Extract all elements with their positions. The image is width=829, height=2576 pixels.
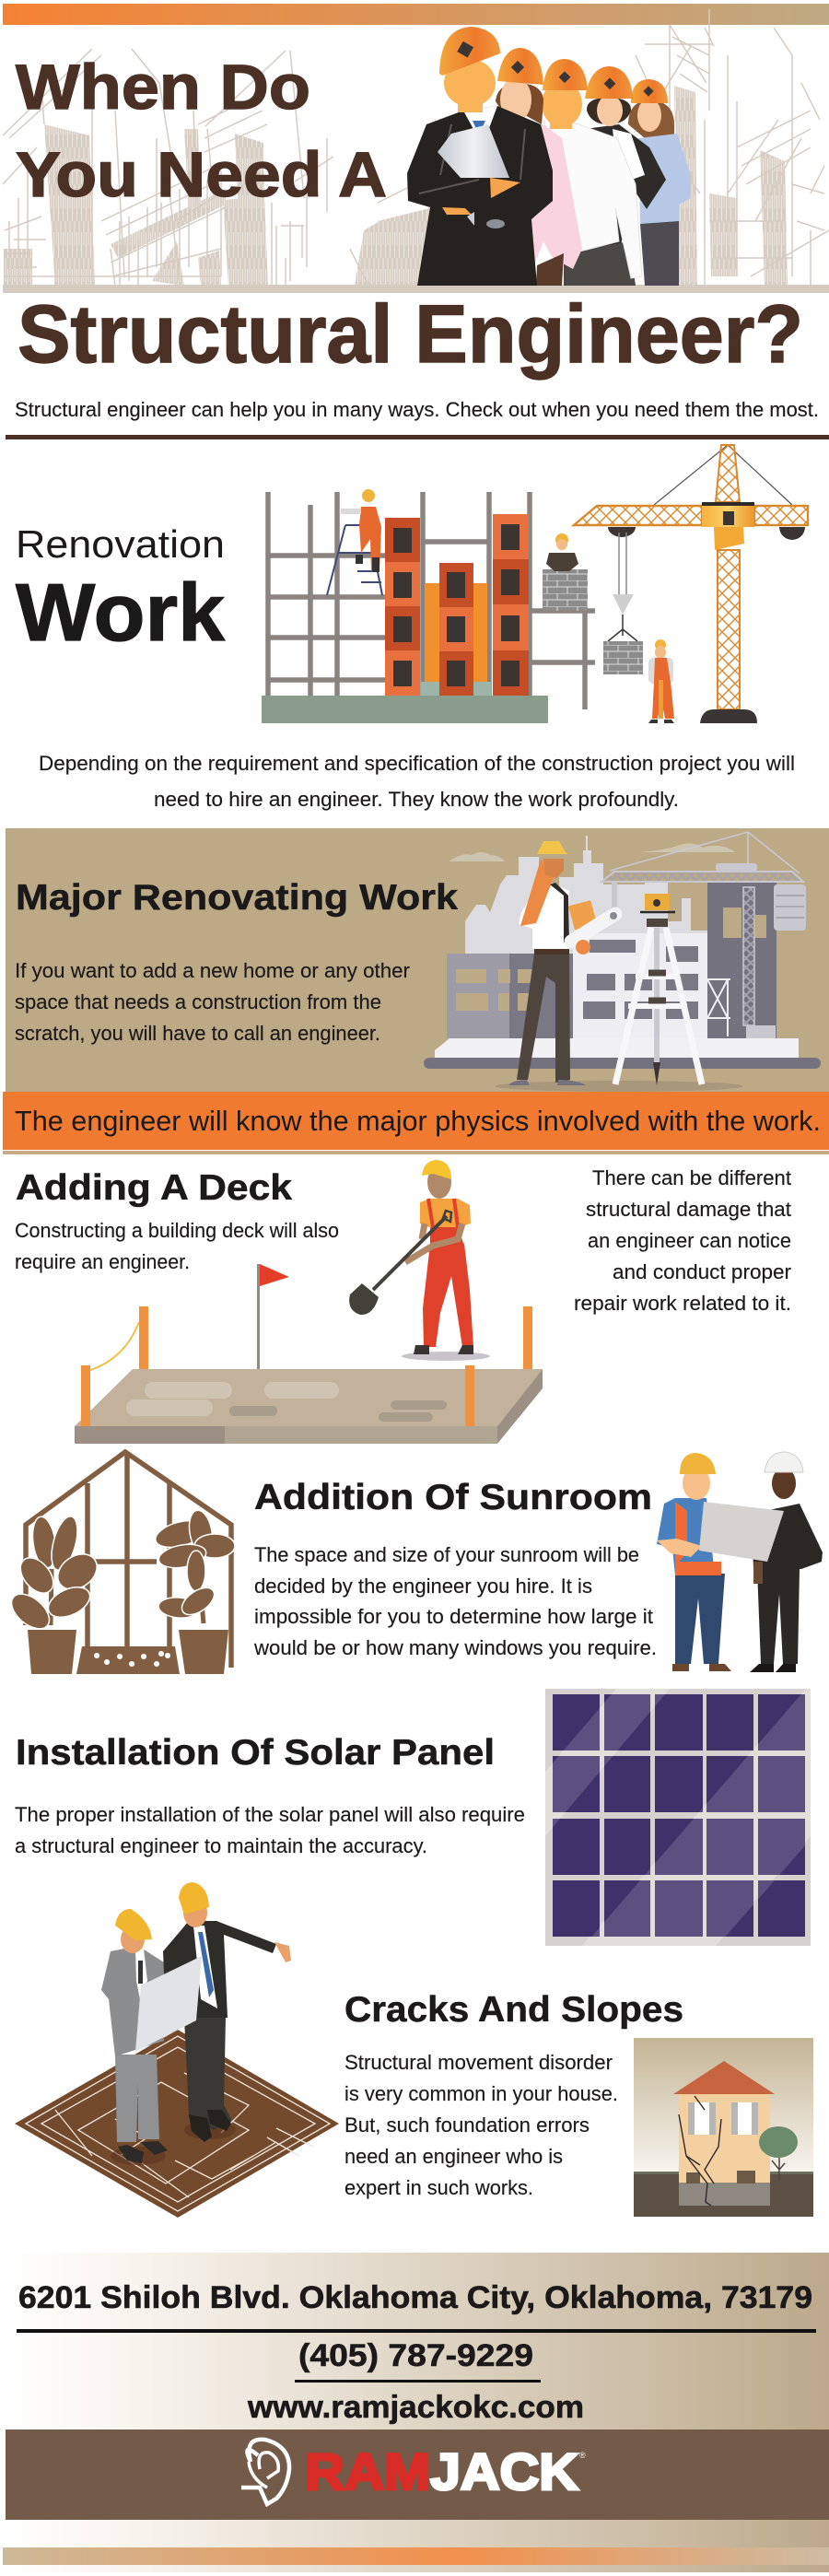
section: addition of sunroom: [6, 1452, 823, 1674]
header rule: [6, 435, 829, 439]
illustration: engineers on floor plan: [15, 1882, 339, 2218]
address: 6201 Shiloh Blvd. Oklahoma City, Oklahoma, 73179: [18, 2280, 812, 2315]
section: installation of solar panel: [15, 1689, 813, 1948]
heading major renovating: Major Renovating Work: [16, 878, 458, 918]
cracks paragraph: is very common in your house.: [344, 2082, 618, 2105]
sketch city background: [3, 9, 829, 293]
engineer in dark suit: [163, 1882, 291, 2142]
worker with shovel: [349, 1160, 490, 1361]
icon: ram head: [241, 2440, 289, 2504]
sunroom paragraph: The space and size of your sunroom will be: [254, 1543, 639, 1566]
engineer three: [542, 59, 642, 286]
engineer five: [628, 79, 691, 286]
solar paragraph: a structural engineer to maintain the accuracy.: [15, 1834, 427, 1857]
cracks paragraph: need an engineer who is: [344, 2145, 563, 2168]
phone: (405) 787-9229: [298, 2338, 533, 2373]
heading sunroom: Addition Of Sunroom: [254, 1478, 652, 1517]
website: www.ramjackokc.com: [247, 2390, 584, 2425]
major renovating paragraph: scratch, you will have to call an engineer.: [15, 1022, 380, 1045]
bottom gradient bar: [3, 2547, 829, 2565]
sunroom paragraph: would be or how many windows you require.: [253, 1636, 657, 1659]
heading adding a deck: Adding A Deck: [16, 1168, 292, 1208]
cracks paragraph: expert in such works.: [344, 2176, 533, 2199]
brand band: [6, 2430, 829, 2520]
illustration: tower crane: [574, 445, 808, 723]
major renovating paragraph: If you want to add a new home or any other: [15, 959, 410, 982]
major renovating paragraph: space that needs a construction from the: [15, 990, 381, 1013]
illustration: city construction site: [424, 832, 821, 1092]
renovation paragraph: [39, 752, 795, 811]
heading line 2: You Need A: [16, 139, 387, 210]
logo wordmark: RAM: [305, 2442, 430, 2500]
cracks paragraph: But, such foundation errors: [344, 2113, 590, 2137]
illustration: cracked house: [634, 2038, 813, 2217]
surveyor with phone and plans: [508, 841, 617, 1085]
engineer one with rolled plans: [407, 27, 553, 286]
worker with jackhammer: [648, 639, 674, 723]
heading solar panel: Installation Of Solar Panel: [16, 1733, 495, 1773]
engineer two: [496, 48, 582, 286]
worker laying bricks: [546, 533, 578, 571]
solar paragraph: The proper installation of the solar panel will also require: [15, 1803, 525, 1826]
panel: major renovating work: [6, 828, 829, 1092]
footer contact panel: [0, 2253, 829, 2572]
surveying tripod: [615, 894, 702, 1085]
deck paragraph left: [15, 1219, 339, 1273]
engineer in grey suit: [101, 1909, 168, 2163]
illustration: building under construction: [262, 489, 674, 723]
section: renovation work: [16, 445, 808, 723]
illustration: deck platform: [75, 1264, 543, 1444]
orange callout band: [3, 1092, 829, 1154]
solar paragraph: [15, 1803, 525, 1857]
header panel: [3, 9, 829, 439]
heading cracks: Cracks And Slopes: [344, 1990, 683, 2030]
deck paragraph right: repair work related to it.: [574, 1292, 791, 1315]
logo wordmark: ®: [579, 2451, 586, 2460]
engineer four: [585, 66, 666, 276]
sunroom paragraph: impossible for you to determine how large it: [254, 1605, 653, 1628]
intro sentence: Structural engineer can help you in many ways. Check out when you need them the most.: [15, 398, 819, 421]
section: cracks and slopes: [15, 1882, 813, 2218]
deck paragraph left: require an engineer.: [15, 1250, 190, 1273]
logo wordmark: [305, 2442, 586, 2500]
deck paragraph right: [574, 1166, 791, 1315]
logo wordmark: JACK: [430, 2442, 578, 2500]
blueprint sheet: [135, 1956, 202, 2052]
orange callout band: The engineer will know the major physics involved with the work.: [15, 1105, 821, 1137]
illustration: two engineers with plan: [657, 1452, 823, 1672]
renovation paragraph: Depending on the requirement and specification of the construction project you will: [39, 752, 795, 775]
floor plan: [15, 2030, 339, 2218]
top gradient bar: [3, 4, 829, 25]
deck paragraph right: and conduct proper: [613, 1260, 791, 1283]
illustration: solar panel: [545, 1689, 813, 1948]
sunroom paragraph: decided by the engineer you hire. It is: [254, 1575, 592, 1598]
cracks paragraph: Structural movement disorder: [344, 2051, 613, 2074]
group of five engineers: [407, 27, 691, 286]
deck paragraph right: structural damage that: [586, 1198, 791, 1221]
renovation paragraph: need to hire an engineer. They know the work profoundly.: [154, 788, 679, 811]
major renovating paragraph: [15, 959, 410, 1045]
icon: greenhouse with plants: [6, 1452, 235, 1674]
heading work: Work: [16, 567, 226, 658]
heading line 1: When Do: [16, 52, 310, 123]
heading renovation: Renovation: [16, 522, 225, 566]
deck paragraph right: There can be different: [592, 1166, 791, 1189]
sunroom paragraph: [253, 1543, 657, 1659]
cracks paragraph: [344, 2051, 618, 2199]
deck paragraph left: Constructing a building deck will also: [15, 1219, 339, 1242]
section: adding a deck: [15, 1160, 791, 1444]
heading line 3: Structural Engineer?: [18, 287, 803, 380]
deck paragraph right: an engineer can notice: [588, 1229, 791, 1252]
worker on ladder: [327, 489, 382, 595]
